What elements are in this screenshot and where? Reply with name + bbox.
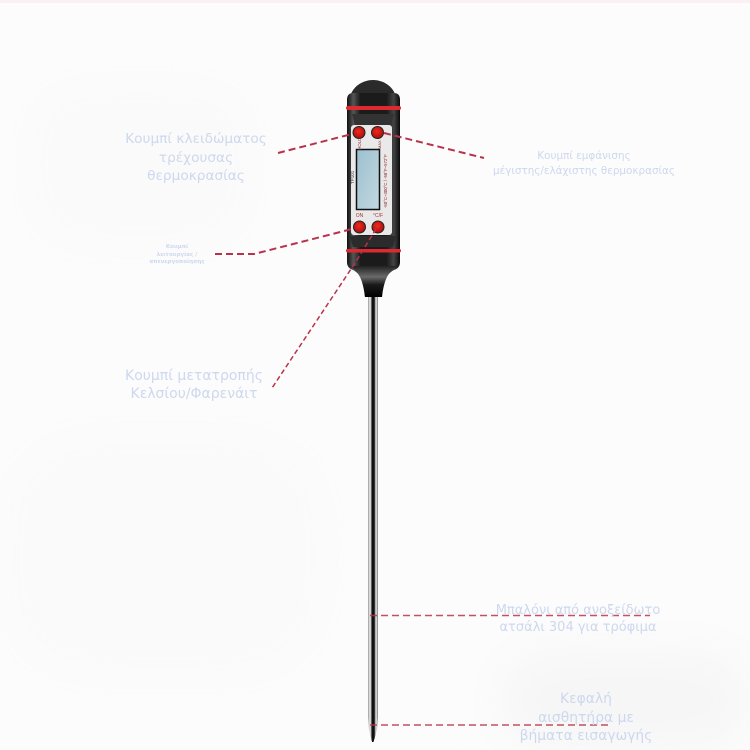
label: unit button: Κουμπί μετατροπής	[125, 368, 263, 384]
label: hold button: τρέχουσας	[159, 150, 233, 166]
label: power button	[149, 244, 205, 265]
range label: -50°C~300°C / -58°F~572°F	[383, 154, 388, 208]
label: power button: Κουμπί	[166, 244, 188, 250]
top-left button	[353, 126, 365, 138]
white control panel	[351, 125, 392, 235]
callout line: hold button	[278, 134, 352, 153]
label: max/min button: μέγιστης/ελάχιστης θερμοκρασίας	[493, 164, 675, 176]
stainless steel probe	[368, 292, 378, 742]
label: power button: λειτουργίας /	[157, 252, 197, 258]
button label MAX MIN: MAX	[377, 140, 382, 149]
label: hold button	[125, 131, 267, 184]
label: probe material: Μπαλόνι από ανοξείδωτο	[496, 603, 660, 618]
callout line: probe	[370, 614, 650, 616]
label: hold button: θερμοκρασίας	[147, 168, 245, 184]
neck highlight	[350, 266, 397, 297]
label: max/min button	[493, 150, 675, 176]
main body	[347, 93, 400, 297]
label: probe material: ατσάλι 304 για τρόφιμα	[499, 620, 656, 635]
label: sensor head: βήματα εισαγωγής	[520, 728, 652, 744]
label: probe material	[496, 603, 660, 635]
label: power button: απενεργοποίησης	[149, 259, 205, 265]
top-right button	[372, 126, 384, 138]
label: unit button	[125, 368, 263, 402]
model label: TP101	[350, 170, 355, 184]
lower red band	[346, 249, 401, 252]
callout line: power button	[215, 229, 352, 254]
dome cap	[351, 80, 395, 94]
bottom-left button	[354, 221, 366, 233]
label: max/min button: Κουμπί εμφάνισης	[537, 150, 631, 162]
callout line: max/min button	[384, 133, 484, 158]
callout line: unit button	[272, 229, 376, 388]
inner lower bevel	[350, 236, 396, 247]
thermometer handle	[346, 80, 401, 297]
LCD screen	[356, 150, 380, 210]
label: hold button: Κουμπί κλειδώματος	[125, 131, 267, 147]
callout line: sensor head	[370, 724, 610, 726]
bottom-right button	[372, 221, 384, 233]
button label ON OFF: ON	[356, 213, 364, 219]
label: unit button: Κελσίου/Φαρενάιτ	[131, 386, 257, 402]
label: sensor head	[520, 691, 652, 744]
inner upper bevel	[352, 114, 394, 125]
button label C F: °C/F	[373, 213, 383, 219]
label: sensor head: Κεφαλή	[560, 691, 612, 707]
label: sensor head: αισθητήρα με	[538, 710, 634, 726]
upper red band	[346, 106, 401, 110]
button label HOLD: HOLD	[357, 137, 362, 150]
